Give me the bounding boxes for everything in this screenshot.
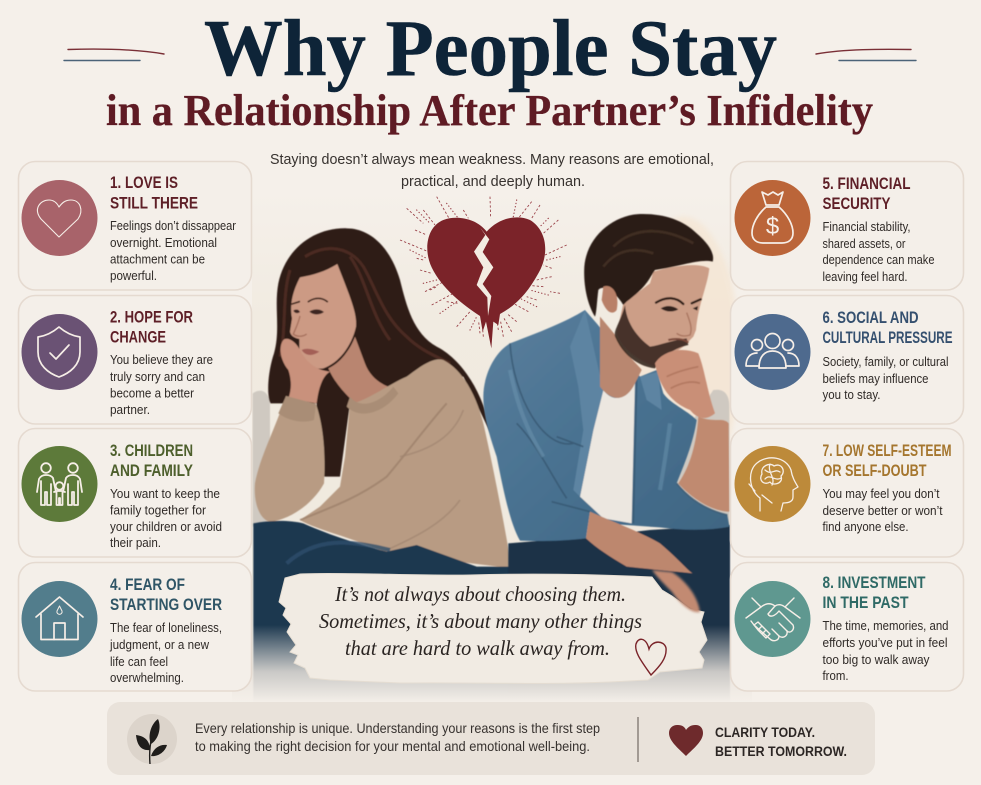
heading: 1. LOVE IS (110, 174, 178, 192)
icon: family (37, 463, 82, 505)
decorative title flourish left (64, 49, 164, 60)
footer message (195, 721, 600, 754)
icon: broken heart with splatter (400, 197, 567, 348)
body text: overnight. Emotional (110, 235, 217, 250)
panel: 1 love is still there (18, 162, 252, 290)
body text (110, 218, 237, 283)
icon: money bag (752, 192, 793, 243)
panel: 3 children and family (18, 428, 252, 557)
body text: overwhelming. (110, 670, 184, 685)
heading (822, 309, 952, 347)
man's hand over quote paper (652, 570, 700, 612)
heading: STARTING OVER (110, 596, 222, 614)
photo bottom fade (232, 625, 752, 703)
icon: hand drawn heart (636, 639, 666, 675)
subtitle: in a Relationship After Partner’s Infidelity (106, 86, 873, 135)
icon: solid heart (669, 725, 703, 756)
heading: 3. CHILDREN (110, 442, 193, 460)
body text (822, 219, 934, 284)
quote text: Sometimes, it’s about many other things (319, 609, 642, 633)
body text: You believe they are (110, 352, 213, 367)
body text: The fear of loneliness, (110, 620, 222, 635)
icon: handshake (746, 598, 800, 641)
heading: AND FAMILY (110, 462, 193, 480)
icon: shield with check (38, 327, 80, 377)
quote text: that are hard to walk away from. (345, 636, 610, 660)
body text: The time, memories, and (822, 618, 948, 633)
body text: judgment, or a new (109, 637, 210, 652)
icon: plant sprig (127, 714, 177, 764)
body text: truly sorry and can (110, 369, 205, 384)
woman (253, 228, 512, 710)
body text: You may feel you don’t (822, 486, 940, 501)
heading: 5. FINANCIAL (822, 175, 910, 193)
footer tagline (715, 725, 847, 759)
man (483, 214, 730, 710)
body text: too big to walk away (822, 652, 930, 667)
heading: OR SELF-DOUBT (822, 462, 926, 480)
body text: leaving feel hard. (822, 269, 908, 284)
body text: You want to keep the (110, 486, 220, 501)
decorative title flourish right (816, 49, 916, 60)
body text (822, 354, 949, 402)
body text: Society, family, or cultural (822, 354, 949, 369)
intro text: practical, and deeply human. (401, 174, 585, 190)
panel: 4 fear of starting over (18, 562, 252, 691)
quote text: It’s not always about choosing them. (334, 582, 626, 606)
body text: life can feel (110, 654, 168, 669)
quote panel on torn paper (279, 573, 707, 683)
heading (110, 174, 198, 212)
footer tagline: BETTER TOMORROW. (715, 744, 847, 759)
heading: IN THE PAST (822, 594, 908, 612)
body text: dependence can make (822, 252, 934, 267)
heading: 8. INVESTMENT (822, 574, 926, 592)
body text: Feelings don’t dissappear (110, 218, 237, 233)
title: Why People Stay (204, 5, 777, 93)
heading: 2. HOPE FOR (110, 308, 193, 326)
body text: your children or avoid (110, 519, 222, 534)
footer message: to making the right decision for your mental and emotional well-being. (195, 739, 590, 754)
body text (109, 620, 222, 685)
body text: deserve better or won’t (822, 503, 943, 518)
body text (110, 486, 222, 550)
footer banner (107, 702, 875, 775)
panel: 5 financial security (730, 162, 964, 290)
body text: beliefs may influence (822, 371, 928, 386)
icon: money bag: $ (766, 213, 779, 240)
heading (822, 442, 952, 480)
body text: family together for (110, 502, 207, 518)
panel: 6 social and cultural pressure (730, 296, 964, 424)
heading (110, 442, 193, 480)
body text: efforts you’ve put in feel (822, 635, 948, 650)
heading (110, 576, 222, 614)
heading (822, 574, 926, 612)
quote text (319, 582, 642, 660)
heading: SECURITY (822, 195, 890, 213)
heading: 6. SOCIAL AND (822, 309, 919, 327)
body text: their pain. (110, 535, 161, 550)
heading: STILL THERE (110, 194, 198, 212)
intro text: Staying doesn’t always mean weakness. Many reasons are emotional, (270, 152, 714, 168)
panel: 8 investment in the past (730, 562, 964, 691)
icon: group of people (746, 334, 799, 368)
panel: 2 hope for change (18, 296, 252, 424)
panel: 7 low self-esteem or self-doubt (730, 428, 964, 557)
body text (110, 352, 213, 417)
body text: you to stay. (822, 387, 880, 402)
icon: house (36, 597, 83, 640)
sofa (253, 390, 729, 527)
body text (822, 486, 943, 534)
body text: partner. (110, 402, 150, 417)
body text: find anyone else. (822, 519, 908, 534)
footer tagline: CLARITY TODAY. (715, 725, 815, 740)
body text: attachment can be (110, 252, 205, 266)
body text: shared assets, or (822, 236, 906, 251)
body text: powerful. (110, 268, 157, 283)
icon: heart (37, 200, 81, 237)
body text (822, 618, 948, 683)
heading (110, 308, 193, 346)
body text: become a better (110, 386, 195, 400)
intro text (270, 152, 714, 190)
footer message: Every relationship is unique. Understanding your reasons is the first step (195, 721, 600, 736)
heading: CHANGE (110, 328, 166, 346)
heading: 4. FEAR OF (110, 576, 185, 594)
central photo illustration: couple sitting back to back (252, 190, 740, 710)
body text: from. (822, 668, 848, 683)
heading (822, 175, 910, 213)
body text: Financial stability, (822, 219, 910, 234)
icon: head with tangled thoughts (749, 458, 798, 511)
